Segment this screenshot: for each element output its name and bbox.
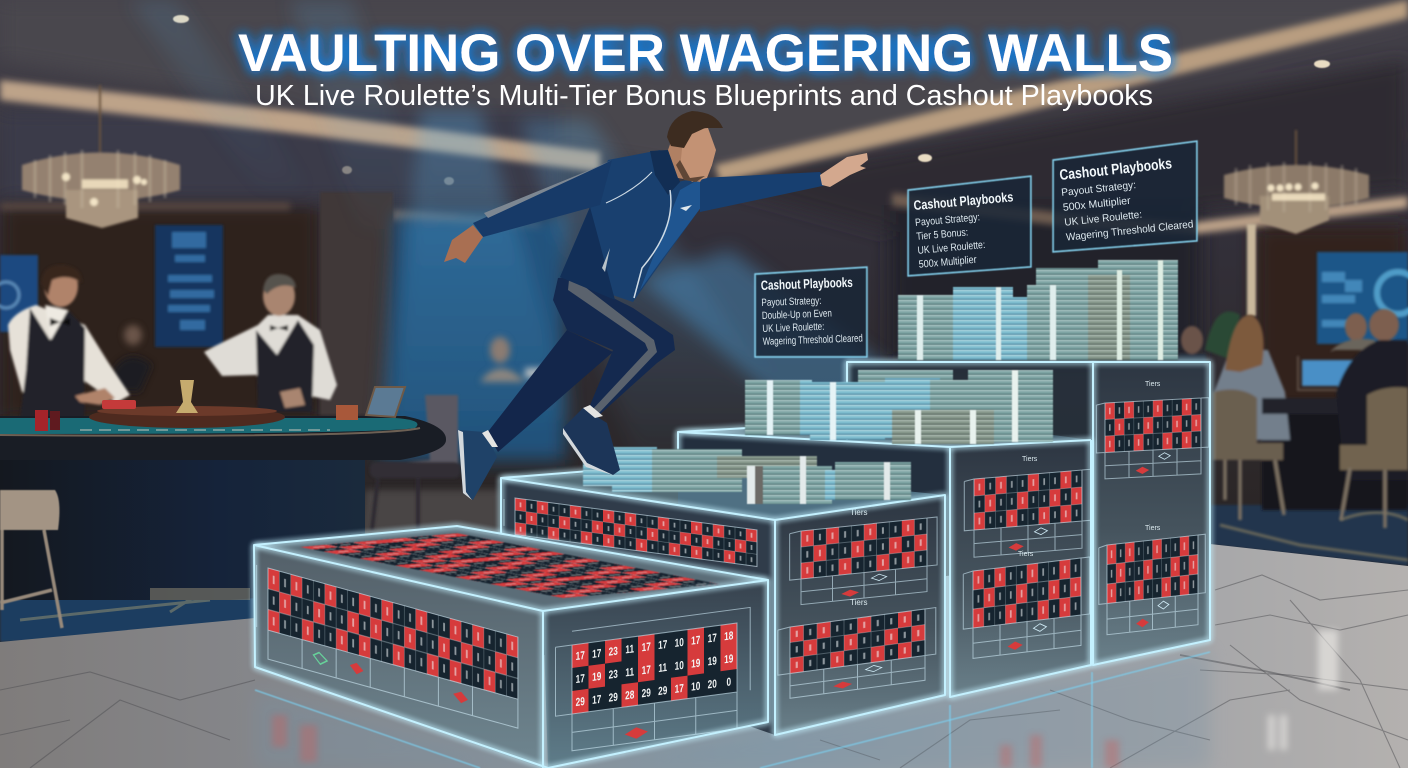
panel: cashout playbooks high: Payout Strategy:: [1061, 179, 1137, 199]
panel: cashout playbooks high: UK Live Roulette:: [1064, 209, 1143, 229]
floor light reflections: [1268, 630, 1338, 750]
panel: cashout playbooks mid: Cashout Playbooks: [913, 189, 1014, 213]
hair: [667, 111, 723, 148]
tier 2 box: [501, 464, 945, 735]
tier 1 top face: [254, 526, 768, 611]
lead arm: [700, 172, 827, 212]
panel: cashout playbooks high: Wagering Threshold Cleared: [1065, 218, 1194, 244]
tier 2 left face: [501, 478, 775, 735]
panel: cashout playbooks low: UK Live Roulette:: [762, 321, 825, 335]
tier 3 box: Tiers: [1022, 456, 1038, 463]
socks: [482, 405, 603, 447]
wall column: [320, 192, 393, 415]
panel: cashout playbooks high: Cashout Playbooks: [1059, 155, 1173, 184]
man vaulting: [444, 111, 868, 500]
title: VAULTING OVER WAGERING WALLS: [238, 24, 1173, 83]
tier 4 right face: [1093, 362, 1210, 665]
tier 3 upper board: [964, 469, 1091, 558]
panel: cashout playbooks mid: UK Live Roulette:: [917, 239, 986, 257]
panel: cashout playbooks high: 500x Multiplier: [1062, 195, 1132, 214]
tier 3 box: Tiers: [1018, 551, 1034, 558]
tier 3 box: [678, 428, 1091, 697]
lead hand: [820, 153, 868, 187]
chair behind table: [370, 395, 460, 530]
tier 3 lower board: [963, 557, 1090, 660]
red reflections on floor: [272, 715, 1119, 768]
panel: cashout playbooks mid: [908, 176, 1031, 276]
right side guests and chairs: [1178, 309, 1408, 528]
panel: cashout playbooks high: [1053, 141, 1197, 252]
money stacks tier 3: [745, 370, 1053, 444]
panel: cashout playbooks low: Payout Strategy:: [761, 295, 822, 309]
torso jacket: [560, 150, 703, 302]
tier 4 lower board: [1099, 534, 1205, 636]
tier 2 box: Tiers: [850, 598, 867, 607]
table chips strip: [80, 429, 330, 431]
tier 4 box: Tiers: [1145, 381, 1161, 388]
tier 3 right face: [950, 440, 1091, 697]
ceiling and wall tones: [0, 0, 1408, 420]
rear leg: [487, 330, 613, 452]
panel: cashout playbooks low: Wagering Threshold Cleared: [763, 332, 863, 348]
right dealer: [204, 274, 337, 412]
tier 4 box: Tiers: [1145, 525, 1161, 532]
panel: cashout playbooks low: Double-Up on Even: [762, 308, 832, 322]
tier 4 upper board: [1096, 398, 1209, 479]
lead leg: [553, 277, 675, 417]
lower shoe: [458, 430, 497, 500]
ceiling light strips: [0, 0, 1408, 234]
tier 2 box: Tiers: [850, 508, 867, 517]
background guest with laptop: [112, 325, 550, 392]
reflection shading below tiers: [255, 650, 1210, 768]
tier 2 left board: [504, 497, 757, 566]
upper shoe: [563, 408, 620, 475]
left chandelier: [22, 85, 180, 228]
rear arm: [473, 160, 612, 237]
tier 2 right face: [775, 495, 945, 735]
tier 2 upper board: [790, 517, 937, 606]
tier 1 right face: [543, 580, 768, 768]
right chandelier: [1224, 130, 1369, 234]
far floor and carpet: [0, 590, 255, 642]
leg stripe: [568, 280, 657, 414]
tier 1 right board with numbers: [556, 607, 750, 753]
tier 1 box: [254, 526, 768, 768]
panel: cashout playbooks mid: Tier 5 Bonus:: [916, 226, 969, 243]
beige chair foreground: [0, 490, 62, 628]
tier 1 top board: [300, 533, 720, 598]
left dealer: [8, 265, 130, 495]
panel: cashout playbooks mid: 500x Multiplier: [918, 254, 978, 271]
red tray: [102, 400, 136, 409]
roulette table: [0, 380, 446, 600]
roulette wheel: [89, 380, 285, 428]
floor reflection glow: [255, 652, 1210, 768]
money stacks tier 4: [898, 260, 1178, 360]
panel: cashout playbooks mid: Payout Strategy:: [915, 211, 980, 229]
wall screens: [0, 225, 1408, 347]
panel: cashout playbooks low: [755, 267, 867, 357]
tier 2 lower board: [778, 608, 936, 700]
tier 1 left board: [257, 565, 518, 728]
panel: cashout playbooks low: Cashout Playbooks: [761, 275, 853, 293]
rear hand: [444, 225, 483, 263]
chips and tablet: [35, 387, 405, 431]
marble floor: [0, 544, 1408, 768]
subtitle: UK Live Roulette’s Multi-Tier Bonus Blueprints and Cashout Playbooks: [255, 80, 1153, 112]
face: [680, 128, 716, 182]
pillar and plant: [1205, 224, 1256, 360]
neck and head: [668, 130, 712, 182]
beard: [676, 160, 705, 182]
tier 1 left face: [254, 545, 543, 768]
ceiling spot lights: [173, 15, 1330, 185]
money stacks tier 2: [583, 447, 911, 504]
tier 4 box: [847, 362, 1210, 665]
blue light beams: [130, 0, 970, 470]
marble veins: [0, 575, 1408, 768]
